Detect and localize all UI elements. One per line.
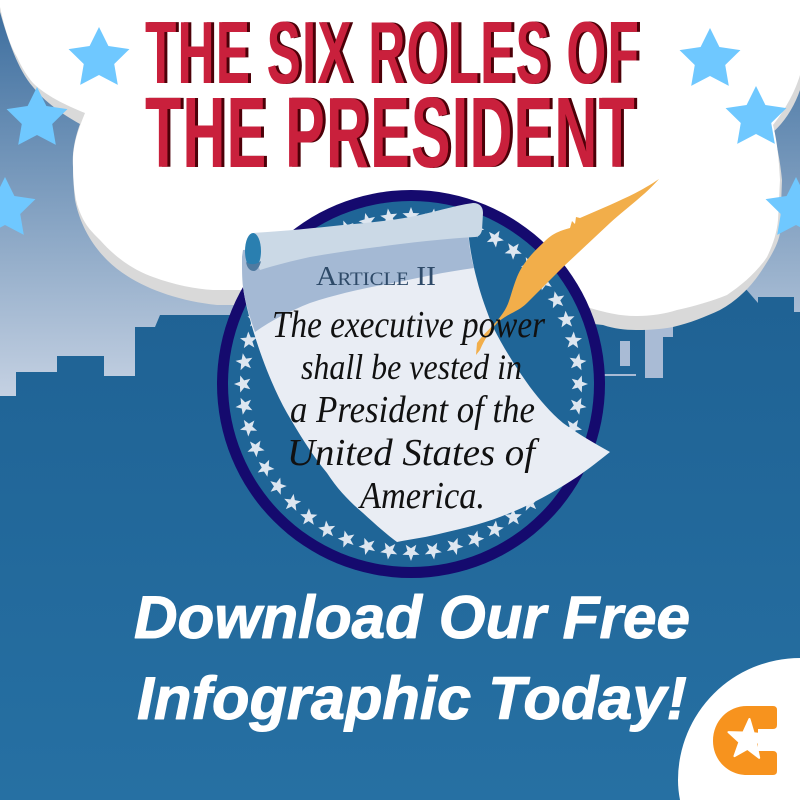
article text: shall be vested in bbox=[301, 347, 522, 387]
logo badge bbox=[678, 658, 800, 800]
call to action bbox=[134, 584, 690, 732]
paper shadow bbox=[242, 230, 474, 332]
article text: The executive power bbox=[272, 304, 545, 346]
article text: America. bbox=[357, 475, 485, 517]
scroll roll end bbox=[245, 233, 261, 271]
call to action line 2: Infographic Today! bbox=[137, 665, 687, 732]
article heading: Article II bbox=[316, 261, 436, 291]
city skyline bbox=[0, 288, 800, 800]
article text bbox=[272, 304, 545, 517]
sky background bbox=[0, 0, 800, 400]
cloud bbox=[0, 0, 800, 316]
article text: a President of the bbox=[290, 389, 535, 431]
paper sheet bbox=[242, 230, 610, 542]
ring of stars bbox=[234, 207, 588, 561]
feather quill bbox=[476, 179, 659, 355]
call to action line 1: Download Our Free bbox=[134, 584, 690, 651]
title bbox=[145, 3, 643, 189]
logo mark bbox=[713, 706, 777, 775]
article text: United States of bbox=[287, 432, 540, 474]
presidential seal bbox=[217, 190, 605, 578]
scroll roll bbox=[250, 203, 483, 270]
parchment scroll bbox=[242, 203, 610, 542]
cloud shadow bbox=[0, 0, 800, 330]
blue stars bbox=[0, 27, 800, 235]
